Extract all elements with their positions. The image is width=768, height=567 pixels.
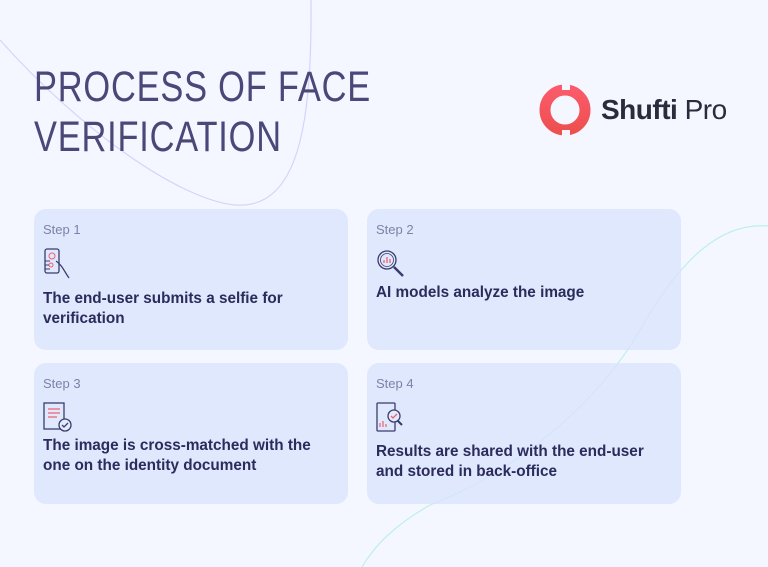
panel: step 1 xyxy=(34,209,348,350)
icon: selfie phone xyxy=(44,248,70,278)
text: The end-user submits a selfie for verification xyxy=(43,290,283,327)
panel: step 4: Step 4 xyxy=(376,376,414,391)
text: The image is cross-matched with the one on the identity document xyxy=(43,437,311,474)
logo: Shufti Pro xyxy=(601,94,727,125)
icon: magnifier chart xyxy=(377,250,404,277)
panel: step 4 xyxy=(367,363,681,504)
panel: step 2 xyxy=(367,209,681,350)
panel: step 2: Step 2 xyxy=(376,222,414,237)
logo xyxy=(540,84,727,136)
icon: tablet magnifier xyxy=(376,402,403,432)
panel: step 3: Step 3 xyxy=(43,376,81,391)
title: VERIFICATION xyxy=(34,113,282,161)
icon: document check xyxy=(43,402,72,432)
title xyxy=(34,63,371,161)
title: PROCESS OF FACE xyxy=(34,63,371,111)
text: AI models analyze the image xyxy=(376,284,584,301)
panel: step 1: Step 1 xyxy=(43,222,81,237)
panel: step 3 xyxy=(34,363,348,504)
text: Results are shared with the end-user and stored in back-office xyxy=(376,443,644,480)
